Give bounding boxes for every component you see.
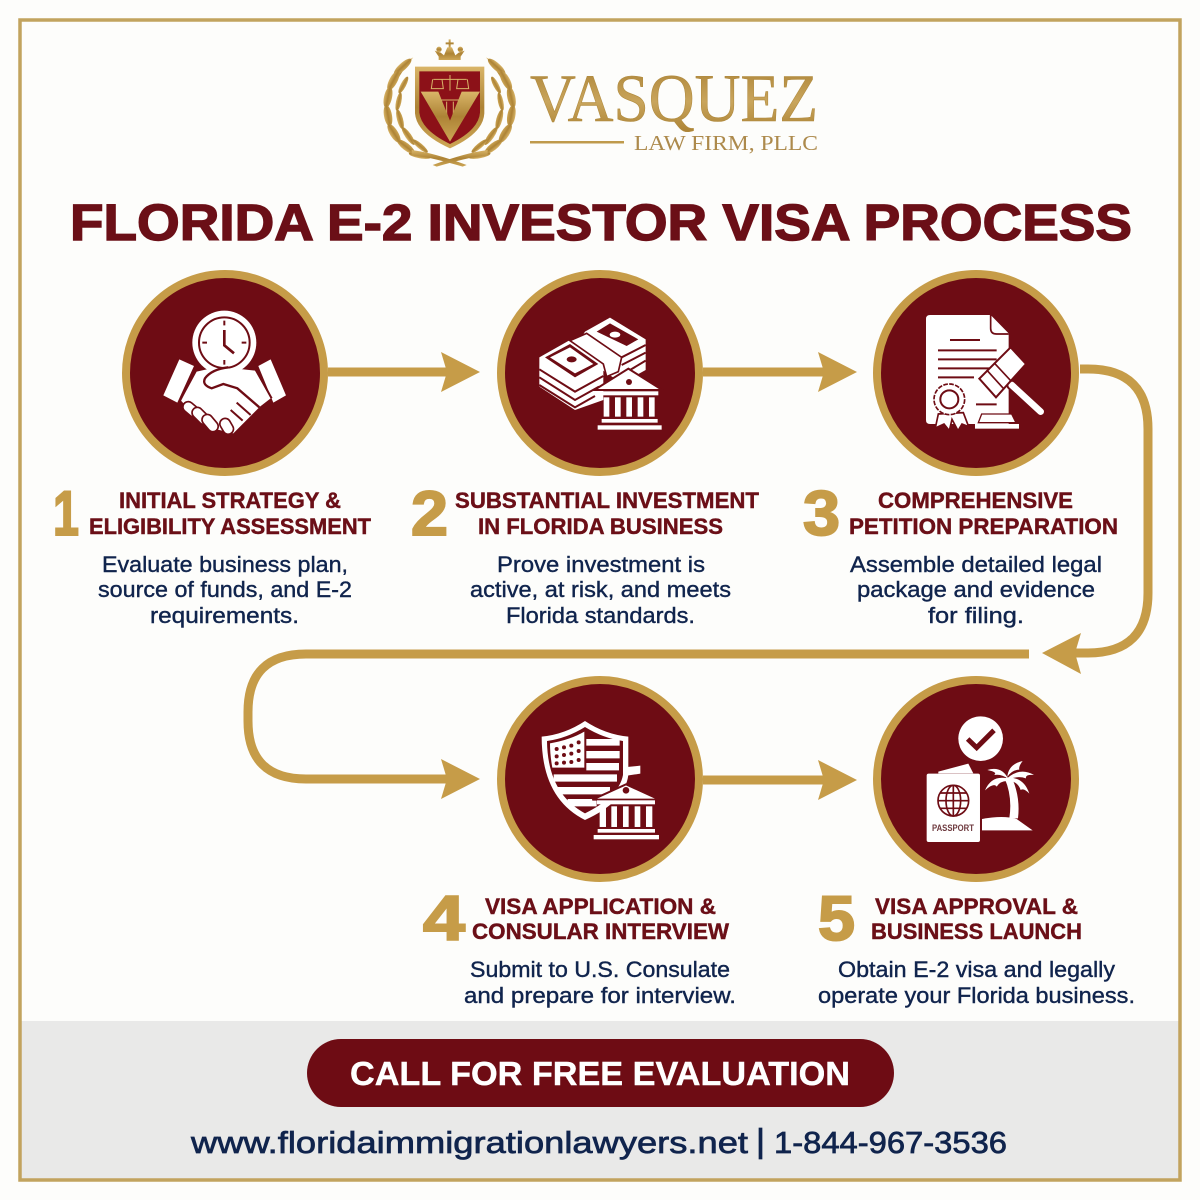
step 2 description: active, at risk, and meets (470, 577, 731, 602)
step 4 description (464, 957, 736, 1008)
step number 2: 2 (411, 479, 448, 549)
step 1 description (98, 552, 352, 628)
step 2 description: Prove investment is (497, 552, 705, 577)
call to action button (307, 1039, 894, 1107)
step 1 description: Evaluate business plan, (102, 552, 348, 577)
circle badge 2 (501, 274, 699, 472)
step 2 heading (455, 488, 759, 539)
circle badge 3 (877, 274, 1075, 472)
step 5 heading: BUSINESS LAUNCH (871, 919, 1082, 944)
website and phone (190, 1126, 1007, 1160)
step 2 heading: SUBSTANTIAL INVESTMENT (455, 488, 759, 513)
panel: step 5 (818, 680, 1135, 1008)
panel: step 4 (423, 680, 736, 1008)
step 2 description: Florida standards. (506, 603, 695, 628)
step 3 description (850, 552, 1102, 628)
step 1 heading: INITIAL STRATEGY & (119, 488, 341, 513)
title: FLORIDA E-2 INVESTOR VISA PROCESS (70, 194, 1132, 251)
logo emblem (382, 39, 517, 167)
arrow: step 2 to 3 (703, 352, 857, 392)
website and phone: 1-844-967-3536 (774, 1126, 1007, 1160)
wreath (382, 56, 517, 167)
step number 4: 4 (423, 884, 465, 954)
circle badge 1 (126, 274, 324, 472)
footer band (21, 1021, 1179, 1179)
logo: Vasquez Law Firm (382, 39, 818, 167)
arrow: row 2 loop to step 4 (248, 654, 1029, 799)
step 4 heading: VISA APPLICATION & (485, 894, 716, 919)
icon: legal document and gavel (926, 315, 1041, 431)
icon: passport, check and palm: PASSPORT (932, 823, 974, 833)
step 4 description: and prepare for interview. (464, 983, 736, 1008)
website and phone: www.floridaimmigrationlawyers.net (190, 1126, 749, 1160)
step 5 description: Obtain E-2 visa and legally (838, 957, 1116, 982)
logo rule (530, 141, 624, 144)
step 2 heading: IN FLORIDA BUSINESS (478, 514, 723, 539)
step number 1: 1 (53, 479, 79, 549)
circle badge 4 (501, 680, 699, 878)
step 1 heading (89, 488, 371, 539)
call to action button: CALL FOR FREE EVALUATION (350, 1055, 850, 1092)
step number 5: 5 (818, 884, 855, 954)
icon: passport, check and palm (927, 716, 1034, 842)
panel: step 2 (411, 274, 759, 628)
crown (435, 39, 465, 60)
step 1 description: source of funds, and E-2 (98, 577, 352, 602)
shield inner (419, 71, 480, 144)
scales of justice (431, 75, 469, 115)
step 1 description: requirements. (150, 603, 299, 628)
step 3 heading: PETITION PREPARATION (849, 514, 1118, 539)
step 3 heading: COMPREHENSIVE (878, 488, 1073, 513)
step 4 heading: CONSULAR INTERVIEW (472, 919, 730, 944)
V monogram (421, 92, 480, 142)
panel: step 3 (803, 274, 1118, 628)
step 3 description: package and evidence (857, 577, 1095, 602)
step 4 heading (472, 894, 730, 944)
step 3 description: Assemble detailed legal (850, 552, 1102, 577)
step 5 heading (871, 894, 1082, 944)
step 3 description: for filing. (928, 603, 1024, 628)
step 2 description (470, 552, 731, 628)
panel: step 1 (53, 274, 371, 628)
step 3 heading (849, 488, 1118, 539)
step 4 description: Submit to U.S. Consulate (470, 957, 730, 982)
step 5 description: operate your Florida business. (818, 983, 1135, 1008)
icon: cash stacks and bank (539, 318, 662, 430)
arrow: step 1 to 2 (328, 352, 480, 392)
step number 3: 3 (803, 479, 840, 549)
logo wordmark: VASQUEZ (530, 60, 818, 136)
arrow: step 3 down to row 2 (1042, 369, 1148, 674)
icon: flag shield and consulate (542, 721, 660, 839)
shield (415, 67, 484, 148)
step 1 heading: ELIGIBILITY ASSESSMENT (89, 514, 371, 539)
step 5 heading: VISA APPROVAL & (875, 894, 1078, 919)
circle badge 5 (877, 680, 1075, 878)
arrow: step 4 to 5 (703, 760, 857, 800)
step 5 description (818, 957, 1135, 1008)
logo subtitle: LAW FIRM, PLLC (634, 131, 818, 155)
icon: clock and handshake (163, 311, 286, 436)
